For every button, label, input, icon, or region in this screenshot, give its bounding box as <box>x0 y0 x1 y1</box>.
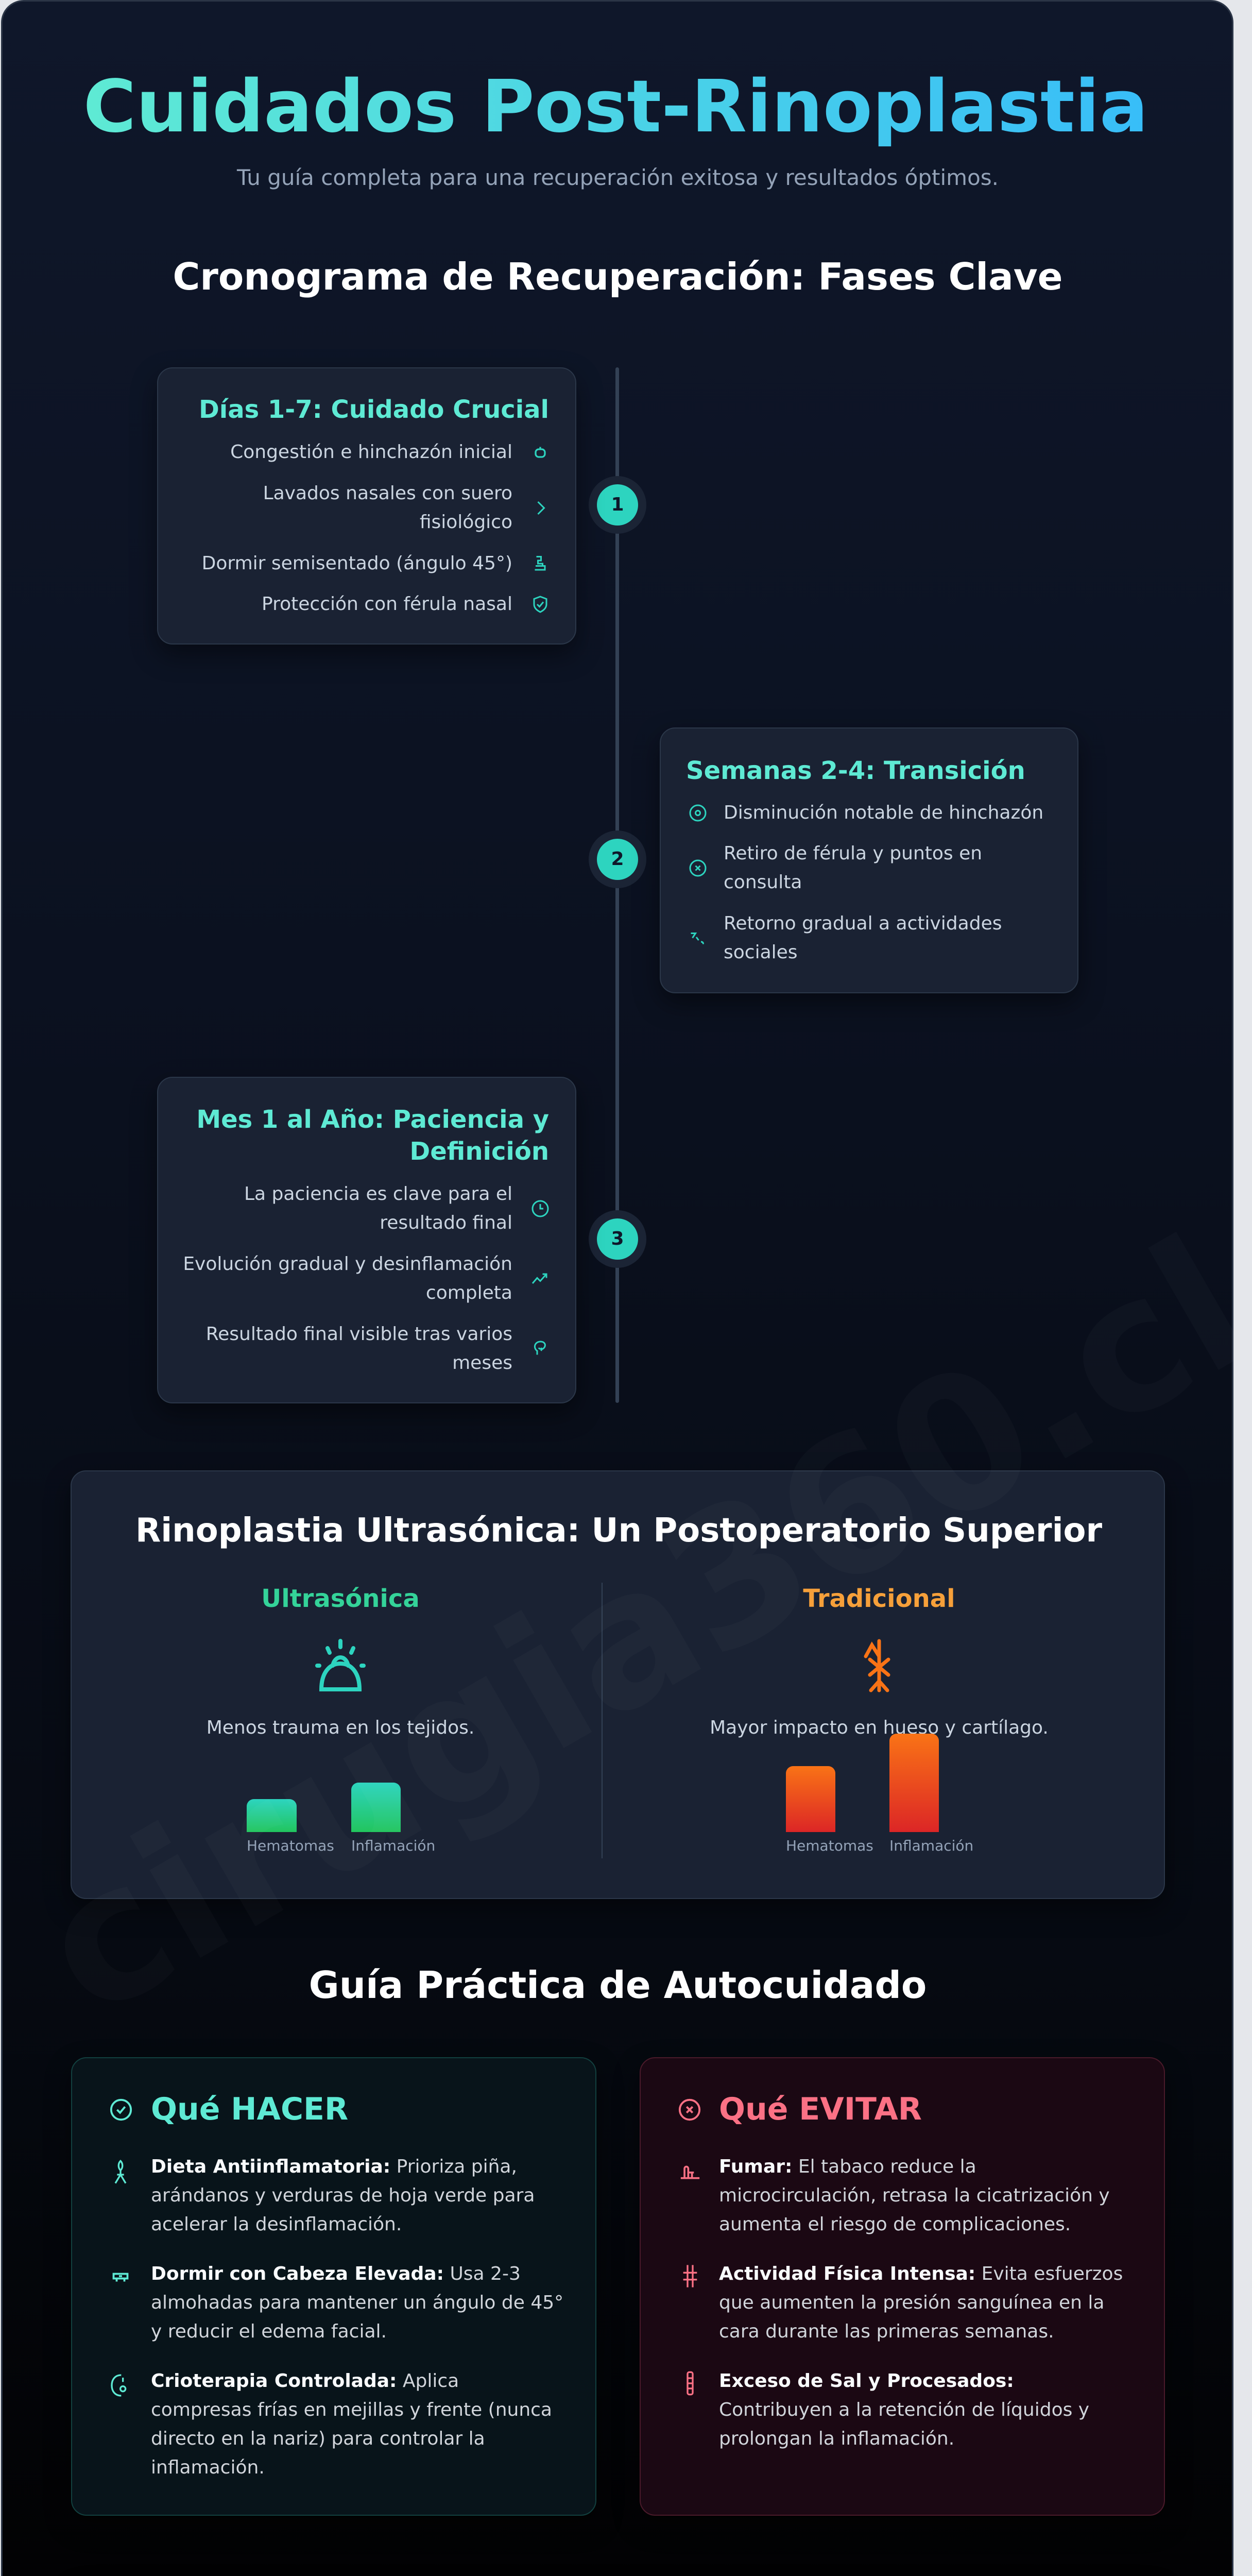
icon: food <box>114 2160 127 2183</box>
item <box>719 2153 1110 2239</box>
column: traditional <box>710 1584 1049 1854</box>
item: compresas frías en mejillas y frente (nunca <box>151 2399 552 2420</box>
card title: Días 1-7: Cuidado Crucial <box>199 395 549 424</box>
icon: salt <box>684 2370 696 2396</box>
description: Mayor impacto en hueso y cartílago. <box>710 1717 1049 1738</box>
item <box>244 1183 512 1233</box>
item: Crioterapia Controlada: Aplica <box>151 2370 459 2392</box>
item: consulta <box>724 872 802 893</box>
icon: bed <box>535 556 546 571</box>
panel: comparison <box>71 1470 1165 1899</box>
title: Qué EVITAR <box>719 2091 922 2127</box>
divider <box>602 1583 603 1858</box>
item: y reducir el edema facial. <box>151 2321 387 2342</box>
item <box>183 1253 512 1303</box>
bar: hematomas <box>786 1766 835 1832</box>
icon: trend <box>532 1274 547 1284</box>
title: Qué HACER <box>151 2091 348 2127</box>
item: meses <box>452 1352 512 1374</box>
item: Disminución notable de hinchazón <box>724 802 1043 823</box>
item <box>724 843 982 893</box>
item: dormir: Dormir semisentado (ángulo 45°) <box>202 553 512 574</box>
marker 3 <box>589 1210 646 1268</box>
item: Actividad Física Intensa: Evita esfuerzos <box>719 2263 1123 2284</box>
panel: month 1 to year <box>157 1077 576 1403</box>
icon: clock <box>531 1200 549 1217</box>
item: Fumar: El tabaco reduce la <box>719 2156 976 2177</box>
marker 1: 1 <box>611 494 624 515</box>
item: Resultado final visible tras varios <box>206 1324 512 1345</box>
icon: x <box>678 2098 701 2122</box>
item <box>151 2260 563 2346</box>
icon: x circle <box>689 859 707 877</box>
item: almohadas para mantener un ángulo de 45° <box>151 2292 563 2313</box>
item: Dieta Antiinflamatoria: Prioriza piña, <box>151 2156 517 2177</box>
marker 1 <box>589 476 646 534</box>
item: lavados: fisiológico <box>420 512 512 533</box>
subtitle: Tu guía completa para una recuperación exitosa y resultados óptimos. <box>237 165 999 190</box>
bar: inflamacion <box>889 1734 939 1832</box>
description: Menos trauma en los tejidos. <box>207 1717 474 1738</box>
panel: days 1-7 <box>157 367 576 645</box>
item: Exceso de Sal y Procesados: <box>719 2370 1014 2392</box>
column: ultrasonic <box>207 1584 474 1854</box>
item: aumenta el riesgo de complicaciones. <box>719 2214 1071 2235</box>
column: ultrasonic: Inflamación <box>351 1837 435 1854</box>
column: traditional: Inflamación <box>889 1837 973 1854</box>
icon: activity <box>681 2263 699 2289</box>
item: inflamación. <box>151 2457 265 2478</box>
icon: nose <box>535 447 546 458</box>
item: directo en la nariz) para controlar la <box>151 2428 485 2449</box>
icon: social <box>691 933 704 944</box>
item: resultado final <box>380 1212 512 1233</box>
timeline line <box>615 367 619 1403</box>
icon: cold <box>109 2372 130 2398</box>
bar labels: Hematomas <box>786 1837 873 1854</box>
icon: pillow <box>111 2267 130 2285</box>
card title: Mes 1 al Año: Paciencia y <box>196 1105 549 1134</box>
item <box>719 2260 1123 2346</box>
panel: weeks 2-4 <box>660 727 1078 993</box>
item: sociales <box>724 942 798 963</box>
item: lavados <box>263 483 512 533</box>
title: Cuidados Post-Rinoplastia <box>83 65 1148 149</box>
panel: avoid <box>640 2057 1165 2516</box>
icon: bell/soft <box>315 1639 366 1691</box>
card title: Definición <box>409 1137 549 1166</box>
icon: broken bone <box>864 1639 890 1692</box>
bar: hematomas <box>247 1799 297 1832</box>
comparison title: Rinoplastia Ultrasónica: Un Postoperatorio Superior <box>135 1512 1102 1550</box>
label: Ultrasónica <box>261 1584 420 1613</box>
item: cara durante las primeras semanas. <box>719 2321 1054 2342</box>
item: que aumenten la presión sanguínea en la <box>719 2292 1104 2313</box>
watermark: cirugia360.cl <box>6 1197 1252 2059</box>
item <box>151 2156 535 2235</box>
marker 2: 2 <box>611 849 624 870</box>
card title: Semanas 2-4: Transición <box>686 756 1025 785</box>
icon: chevron <box>538 501 545 515</box>
item: Contribuyen a la retención de líquidos y <box>719 2399 1089 2420</box>
marker 3: 3 <box>611 1228 624 1249</box>
item <box>719 2367 1089 2453</box>
icon: face <box>534 1341 546 1355</box>
item <box>151 2367 552 2482</box>
item: Evolución gradual y desinflamación <box>183 1253 512 1275</box>
item: prolongan la inflamación. <box>719 2428 954 2449</box>
card title <box>196 1105 549 1166</box>
item <box>206 1324 512 1374</box>
bar labels: Hematomas <box>247 1837 334 1854</box>
item: La paciencia es clave para el <box>244 1183 512 1205</box>
item: microcirculación, retrasa la cicatrización y <box>719 2185 1110 2206</box>
item: ferula: Protección con férula nasal <box>262 594 512 615</box>
item: lavados: Lavados nasales con suero <box>263 483 512 504</box>
icon: smoking <box>679 2161 701 2182</box>
heading: timeline: Cronograma de Recuperación: Fases Clave <box>173 255 1062 298</box>
bar: inflamacion <box>351 1783 401 1832</box>
icon: check <box>110 2099 132 2121</box>
item: completa <box>426 1282 512 1303</box>
item: Dormir con Cabeza Elevada: Usa 2-3 <box>151 2263 521 2284</box>
label: Tradicional <box>803 1584 955 1613</box>
item: arándanos y verduras de hoja verde para <box>151 2185 535 2206</box>
icon: shield <box>534 596 547 613</box>
marker 2 <box>589 831 646 888</box>
icon: eye <box>689 805 707 821</box>
item: Retiro de férula y puntos en <box>724 843 982 864</box>
item: acelerar la desinflamación. <box>151 2214 402 2235</box>
item: Retorno gradual a actividades <box>724 913 1002 934</box>
item <box>724 913 1002 963</box>
panel: do <box>71 2057 596 2516</box>
heading: self-care: Guía Práctica de Autocuidado <box>309 1963 927 2007</box>
item: congestion: Congestión e hinchazón inicial <box>230 442 512 463</box>
